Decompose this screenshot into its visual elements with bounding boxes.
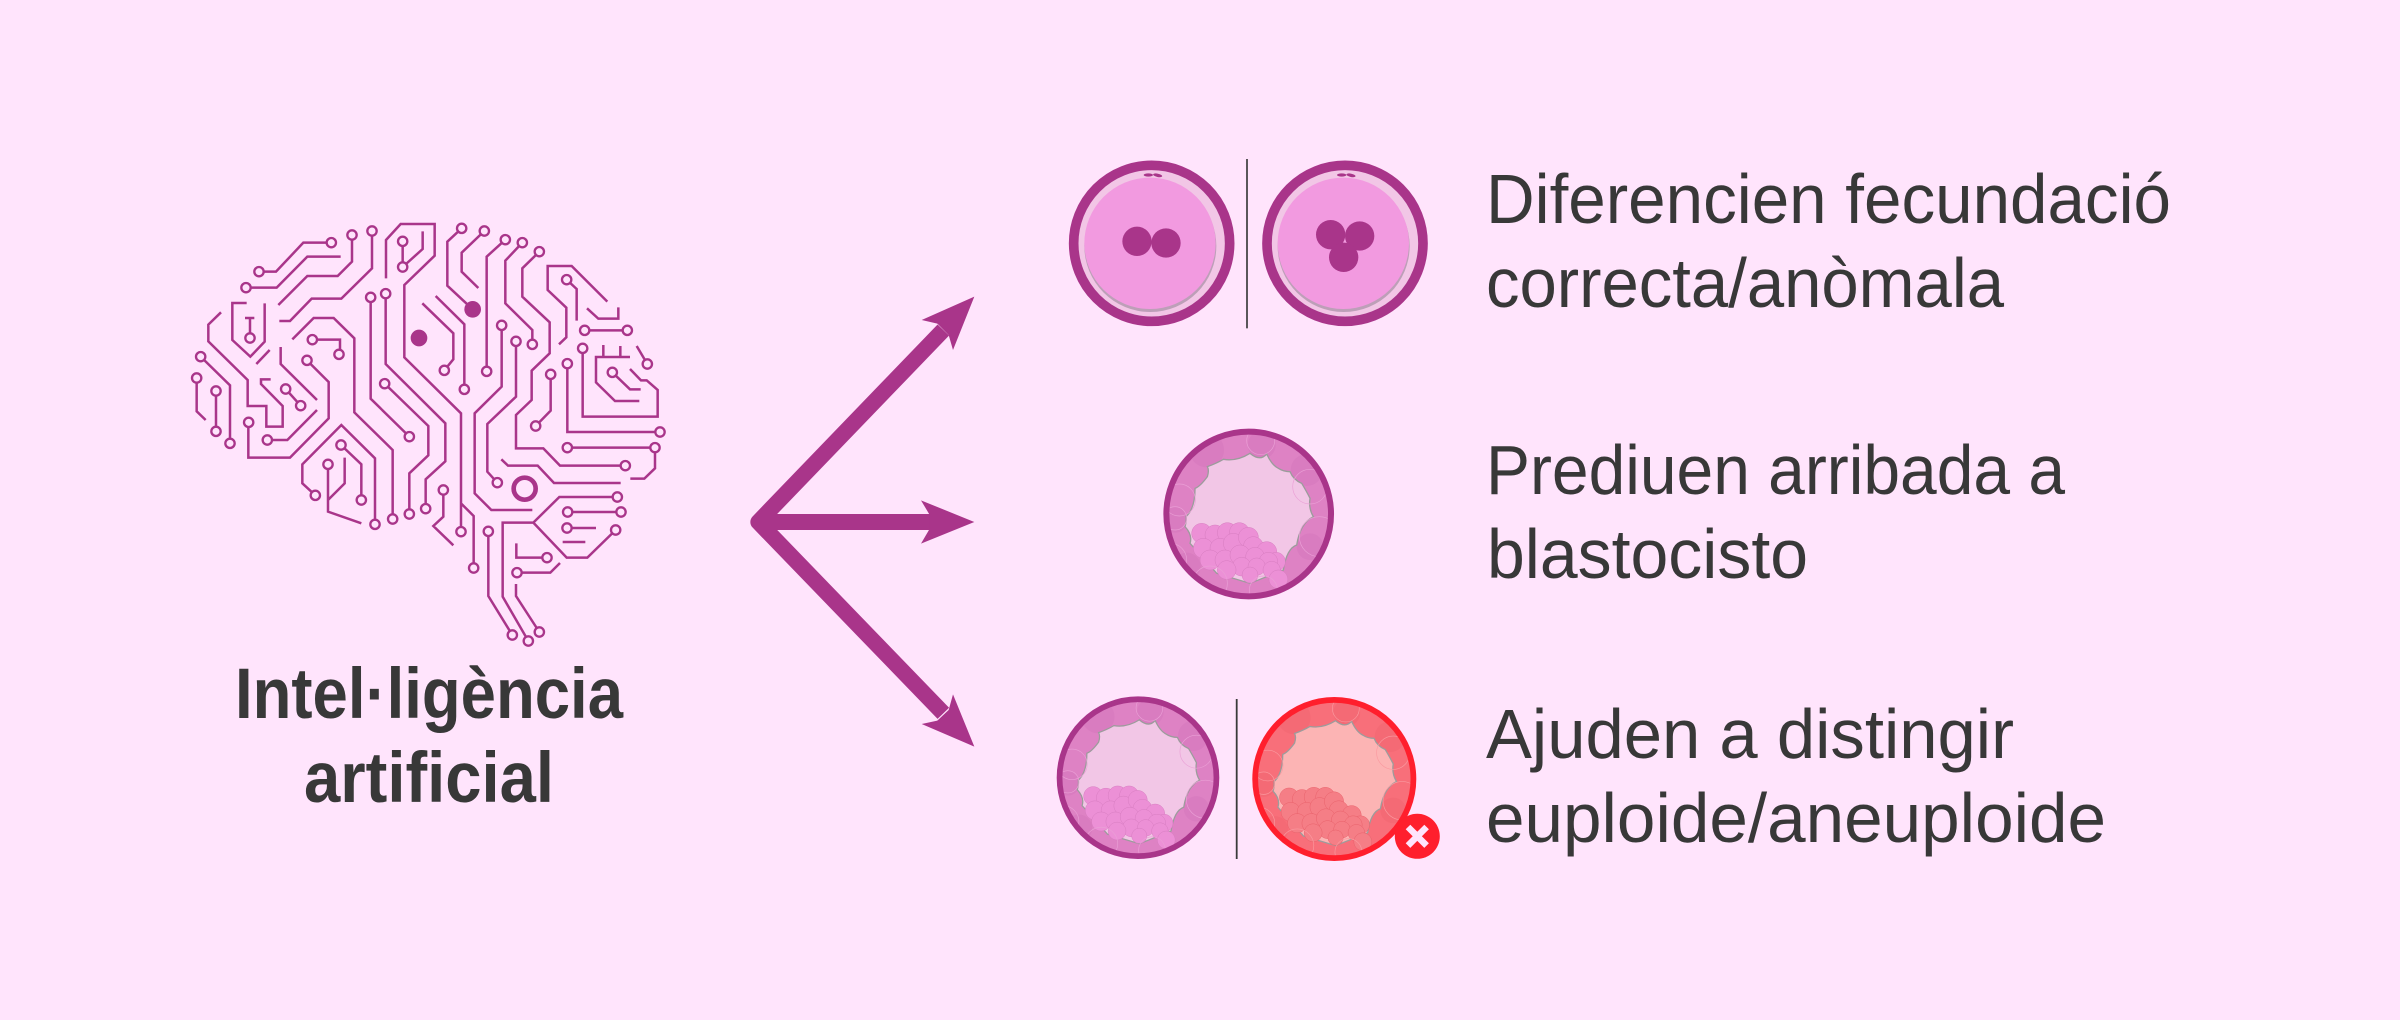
text: row 2 label: blastocisto [1487, 515, 1808, 593]
text: row 2 label: Prediuen arribada a [1486, 431, 2065, 509]
text: row 3 label: euploide/aneuploide [1486, 779, 2106, 857]
heading: Intel·ligència artificial [235, 655, 623, 818]
text: row 1 label: Diferencien fecundació [1486, 160, 2171, 238]
heading: Intel·ligència artificial: artificial [304, 739, 554, 818]
text: row 2 label [1486, 431, 2065, 593]
icon: red cross badge [1395, 814, 1440, 859]
icon: zygote with three pronuclei [1267, 165, 1423, 321]
row 1 icons: normal and abnormal fertilisation zygotes [1074, 159, 1423, 328]
icon: euploid blastocyst [1047, 694, 1224, 863]
text: row 1 label: correcta/anòmala [1486, 244, 2004, 322]
divider line [1236, 699, 1238, 859]
icon: zygote with two pronuclei [1074, 165, 1230, 321]
icon: circuit brain [192, 224, 665, 646]
divider line [1246, 159, 1248, 328]
text: row 3 label [1486, 695, 2106, 857]
arrows: three branching arrows [758, 297, 974, 747]
icon: aneuploid blastocyst [1243, 695, 1421, 865]
text: row 1 label [1486, 160, 2171, 322]
heading: Intel·ligència artificial: Intel·ligència [235, 655, 623, 734]
icon: blastocyst [1153, 427, 1339, 604]
text: row 3 label: Ajuden a distingir [1486, 695, 2014, 773]
row 3 icons: euploid and aneuploid blastocysts [1047, 694, 1440, 865]
